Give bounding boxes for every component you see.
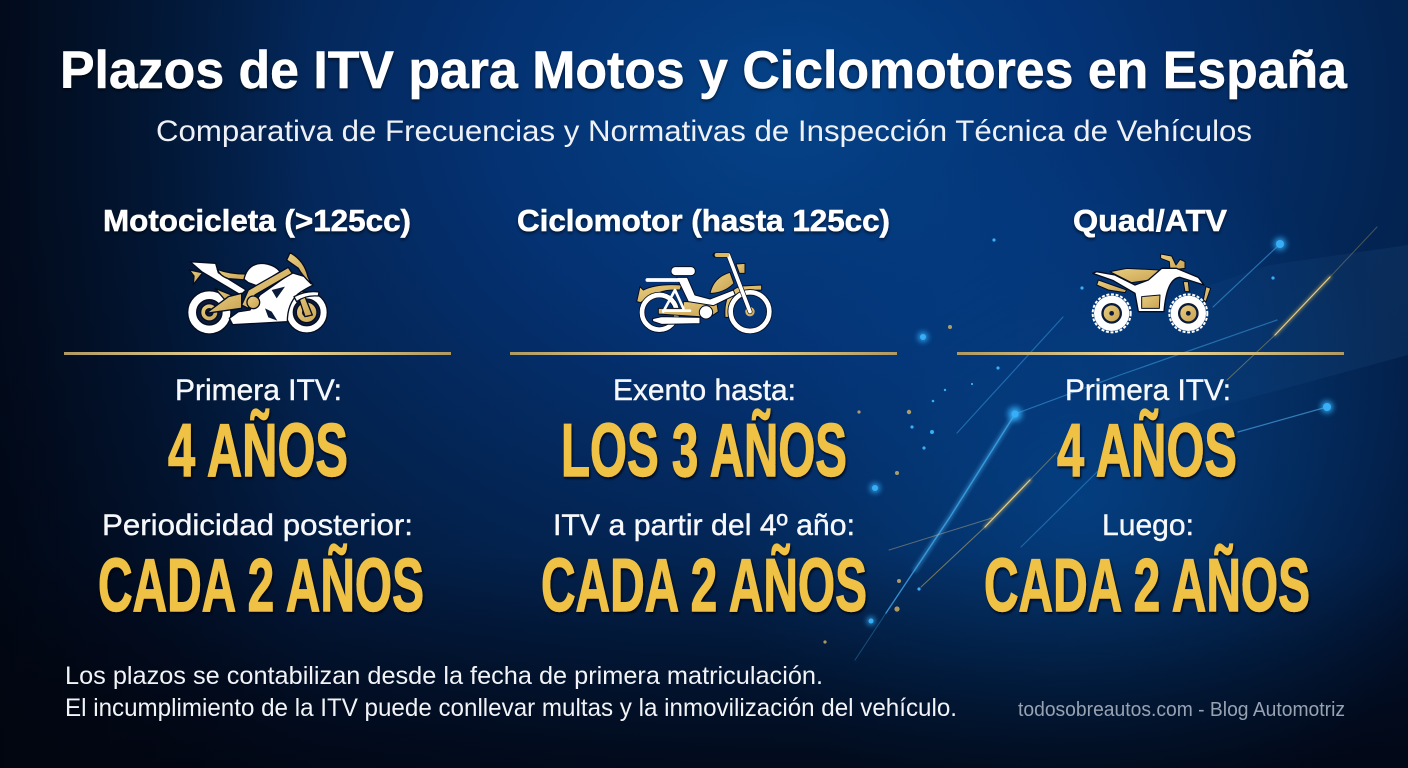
- panel: ciclomotor: [510, 203, 897, 627]
- value: 4 años: 4 AÑOS: [168, 408, 348, 492]
- value: 4 años: 4 AÑOS: [1057, 408, 1237, 492]
- divider: [510, 352, 897, 355]
- heading: ciclomotor: Ciclomotor (hasta 125cc): [517, 203, 890, 238]
- value: los 3 años: LOS 3 AÑOS: [561, 408, 847, 492]
- divider: [64, 352, 451, 355]
- label: primera ITV: Primera ITV:: [1065, 374, 1231, 407]
- icon: motorcycle: [188, 253, 327, 334]
- label: ITV a partir: ITV a partir del 4º año:: [553, 509, 855, 542]
- source credit: todosobreautos.com - Blog Automotriz: [1018, 699, 1345, 721]
- footnote: Los plazos se contabilizan desde la fecha de primera matriculación.: [65, 662, 823, 690]
- icon: moped: [637, 255, 769, 331]
- label: periodicidad: Periodicidad posterior:: [102, 509, 413, 542]
- footnote: [65, 662, 957, 722]
- footnote: El incumplimiento de la ITV puede conllevar multas y la inmovilización del vehículo.: [65, 694, 957, 722]
- panel: motocicleta: [64, 203, 451, 627]
- value: cada 2 años: CADA 2 AÑOS: [541, 543, 867, 627]
- label: exento: Exento hasta:: [613, 374, 796, 407]
- icon: quad: [1093, 254, 1211, 332]
- heading: motocicleta: Motocicleta (>125cc): [103, 203, 411, 238]
- label: luego: Luego:: [1102, 509, 1194, 542]
- divider: [957, 352, 1344, 355]
- decorative light streaks and particles: [823, 227, 1377, 660]
- value: cada 2 años: CADA 2 AÑOS: [98, 543, 424, 627]
- heading: quad: Quad/ATV: [1073, 203, 1227, 238]
- title: Plazos de ITV para Motos y Ciclomotores en España: [60, 41, 1348, 100]
- subtitle: Comparativa de Frecuencias y Normativas de Inspección Técnica de Vehículos: [156, 115, 1252, 148]
- panel: quad: [957, 203, 1344, 627]
- label: primera ITV: Primera ITV:: [175, 374, 342, 407]
